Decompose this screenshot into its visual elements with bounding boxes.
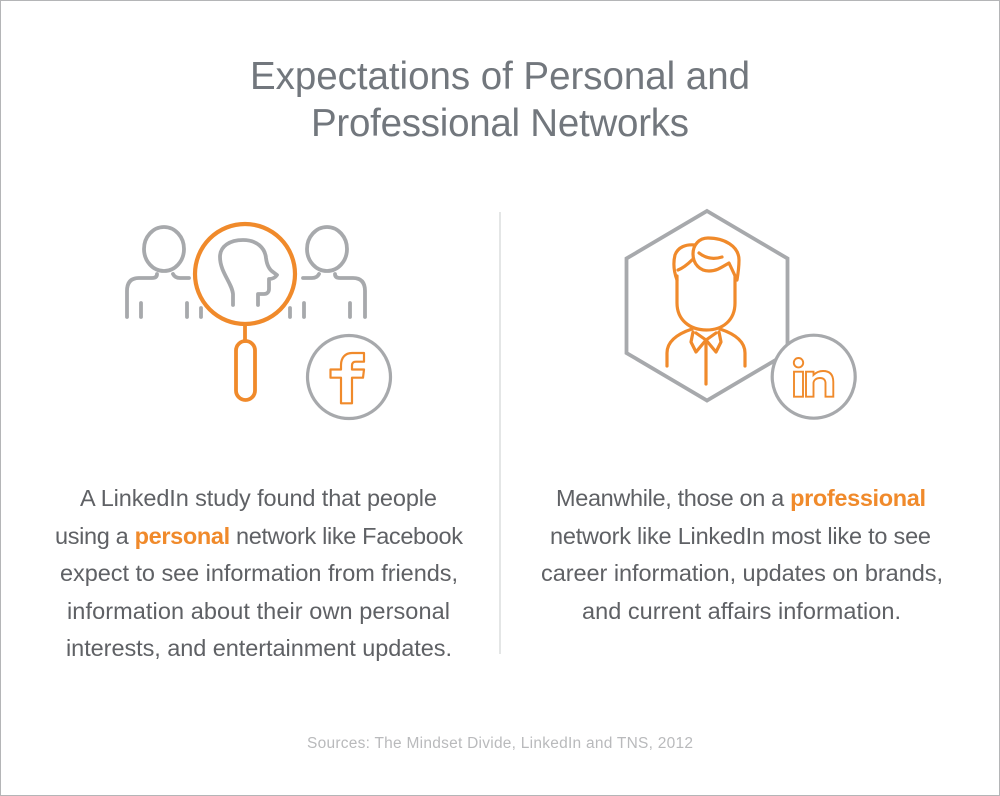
source note: Sources: The Mindset Divide, LinkedIn and TNS, 2012 <box>307 735 693 752</box>
icon: man with collar <box>667 238 745 384</box>
title: Expectations of Personal and <box>250 55 750 98</box>
panel: personal network <box>55 224 463 661</box>
icon: head profile <box>220 240 277 305</box>
icon: Facebook badge <box>308 336 390 418</box>
icon: people under magnifying glass <box>127 224 365 400</box>
text block: personal network description: expect to see information from friends, <box>60 560 458 586</box>
text block: professional network description: and current affairs information. <box>582 598 901 624</box>
icon: professional in hexagon <box>626 211 788 400</box>
text block: professional network description: career information, updates on brands, <box>541 560 943 586</box>
panel: professional network <box>541 211 943 624</box>
text block: personal network description <box>55 485 463 661</box>
icon: left person <box>127 227 201 317</box>
text block: personal network description: using a personal network like Facebook <box>55 523 463 549</box>
text block: professional network description <box>541 485 943 624</box>
icon: hexagon <box>626 211 788 400</box>
icon: right person <box>290 227 365 317</box>
text block: personal network description: interests, and entertainment updates. <box>66 635 452 661</box>
text block: professional network description: network like LinkedIn most like to see <box>550 523 931 549</box>
text block: professional network description: Meanwhile, those on a professional <box>556 485 926 511</box>
title <box>250 55 750 145</box>
icon: magnifying glass <box>195 224 295 400</box>
title: Professional Networks <box>311 102 689 145</box>
text block: personal network description: information about their own personal <box>67 598 450 624</box>
text block: personal network description: A LinkedIn study found that people <box>80 485 437 511</box>
icon: LinkedIn badge <box>772 335 855 418</box>
